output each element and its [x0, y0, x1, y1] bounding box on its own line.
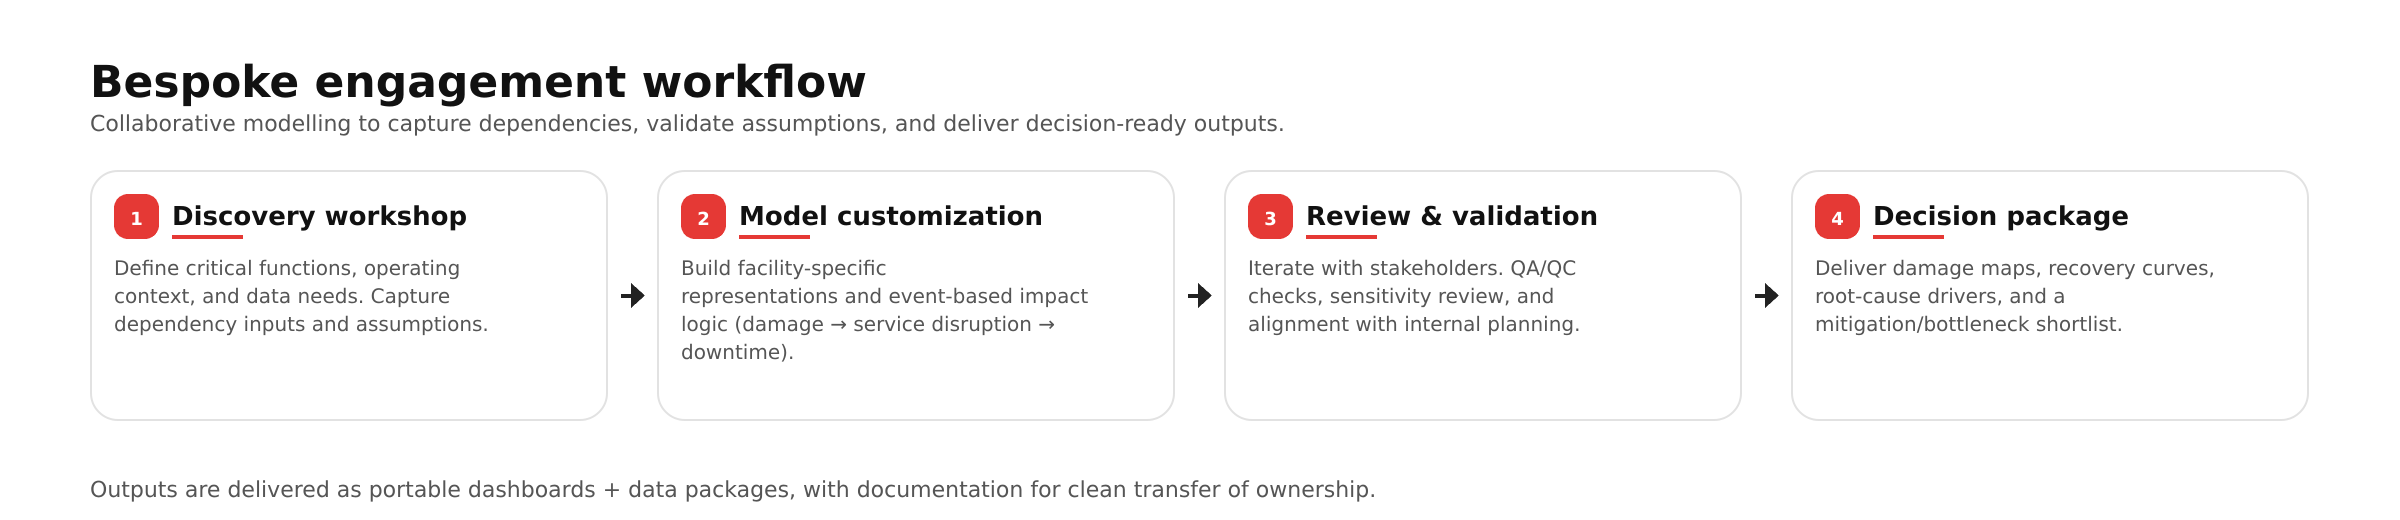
- badge: step 1: [114, 194, 159, 239]
- text: review description: checks, sensitivity review, and: [1248, 284, 1554, 308]
- text: decision description: root-cause drivers, and a: [1815, 284, 2066, 308]
- text: decision description: [1815, 256, 2215, 336]
- panel: step 1 discovery workshop: [90, 170, 608, 421]
- arrow: step 2 to 3: [1188, 283, 1212, 308]
- subtitle: Collaborative modelling to capture dependencies, validate assumptions, and deliver decision-ready outputs.: [90, 112, 1285, 137]
- text: review description: alignment with internal planning.: [1248, 312, 1580, 336]
- text: model description: representations and event-based impact: [681, 284, 1088, 308]
- panel: step 2 model customization: [657, 170, 1175, 421]
- number: 4: 4: [1831, 209, 1844, 230]
- panel: step 3 review and validation: [1224, 170, 1742, 421]
- text: discovery description: context, and data needs. Capture: [114, 284, 450, 308]
- arrow: step 3 to 4: [1755, 283, 1778, 308]
- badge: step 2: [681, 194, 726, 239]
- heading: model customization: Model customization: [739, 202, 1043, 232]
- badge: step 4: [1815, 194, 1860, 239]
- badge: step 3: [1248, 194, 1293, 239]
- underline accent: [739, 235, 810, 239]
- underline accent: [1306, 235, 1377, 239]
- text: discovery description: dependency inputs and assumptions.: [114, 312, 489, 336]
- text: model description: [681, 256, 1088, 364]
- number: 1: 1: [130, 209, 143, 230]
- heading: review and validation: Review & validation: [1306, 202, 1598, 232]
- arrow: step 1 to 2: [621, 283, 644, 308]
- footer note: Outputs are delivered as portable dashboards + data packages, with documentation for clean transfer of ownership.: [90, 478, 1376, 503]
- text: model description: Build facility-specific: [681, 256, 887, 280]
- text: discovery description: [114, 256, 489, 336]
- text: decision description: Deliver damage maps, recovery curves,: [1815, 256, 2215, 280]
- title: Bespoke engagement workflow: [90, 57, 867, 108]
- text: review description: [1248, 256, 1580, 336]
- panel: step 4 decision package: [1791, 170, 2309, 421]
- number: 2: 2: [697, 209, 710, 230]
- text: review description: Iterate with stakeholders. QA/QC: [1248, 256, 1576, 280]
- underline accent: [172, 235, 243, 239]
- text: model description: downtime).: [681, 340, 794, 364]
- text: model description: logic (damage → service disruption →: [681, 312, 1055, 336]
- heading: discovery workshop: Discovery workshop: [172, 202, 467, 232]
- underline accent: [1873, 235, 1944, 239]
- heading: decision package: Decision package: [1873, 202, 2129, 232]
- text: discovery description: Define critical functions, operating: [114, 256, 460, 280]
- text: decision description: mitigation/bottleneck shortlist.: [1815, 312, 2123, 336]
- number: 3: 3: [1264, 209, 1277, 230]
